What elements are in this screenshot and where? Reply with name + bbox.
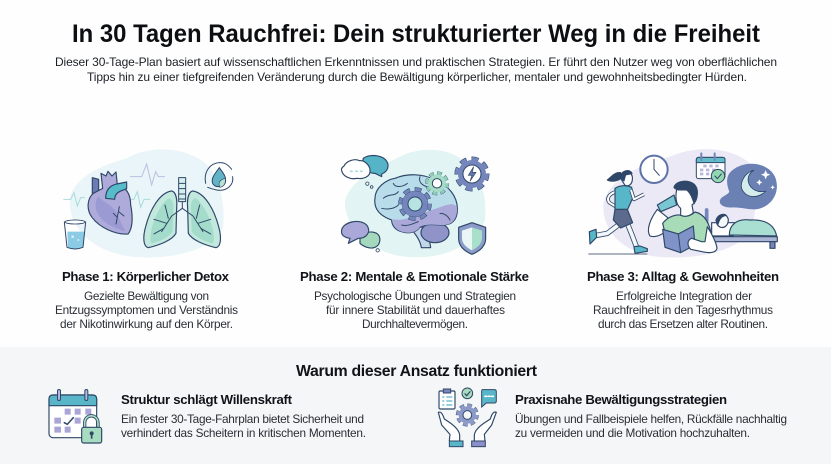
- title: In 30 Tagen Rauchfrei: Dein strukturierter Weg in die Freiheit: [72, 20, 761, 48]
- description: phase 1: Gezielte Bewältigung von: [84, 289, 209, 303]
- description: phase 3: [593, 289, 773, 331]
- icon: heart: [88, 171, 132, 234]
- illustration: body detox: [63, 149, 233, 257]
- heading: structure: Struktur schlägt Willenskraft: [121, 392, 293, 407]
- text: coping strategies: zu vermeiden und die Motivation hochzuhalten.: [515, 426, 750, 440]
- heading: phase 1: Phase 1: Körperlicher Detox: [62, 269, 230, 284]
- icon: night moon: [720, 164, 777, 209]
- icon: hands with gear and checklist: [438, 388, 496, 447]
- description: phase 2: Durchhaltevermögen.: [362, 317, 468, 331]
- icon: energy gear: [457, 159, 487, 189]
- heading: phase 3: Phase 3: Alltag & Gewohnheiten: [587, 269, 779, 284]
- text: structure: Ein fester 30-Tage-Fahrplan bietet Sicherheit und: [121, 412, 364, 426]
- icon: water glass: [64, 220, 86, 249]
- description: phase 3: Rauchfreiheit in den Tagesrhythmus: [593, 303, 773, 317]
- icon: lungs: [144, 178, 221, 248]
- panel: phase 2: [300, 150, 529, 331]
- icon: calendar with lock: [49, 391, 102, 443]
- description: phase 2: für innere Stabilität und dauerhaftes: [326, 303, 505, 317]
- intro text: Dieser 30-Tage-Plan basiert auf wissenschaftlichen Erkenntnissen und praktischen Strategien. Er führt den Nutzer weg von oberflächlichen: [55, 55, 777, 69]
- description: phase 1: der Nikotinwirkung auf den Körper.: [60, 317, 233, 331]
- icon: clock: [640, 156, 668, 183]
- text: structure: [121, 412, 366, 440]
- description: phase 3: Erfolgreiche Integration der: [616, 289, 752, 303]
- description: phase 3: durch das Ersetzen alter Routinen.: [598, 317, 768, 331]
- heading: why it works: Warum dieser Ansatz funktioniert: [296, 363, 538, 380]
- intro text: [55, 55, 777, 84]
- figure: man drinking and reading: [648, 181, 717, 253]
- illustration: daily routines: [588, 149, 777, 257]
- icon: brain with gears: [375, 173, 457, 248]
- icon: speech bubbles: [341, 156, 388, 252]
- figure: sleeping person in bed: [707, 210, 777, 248]
- figure: runner: [588, 170, 647, 254]
- icon: shield: [459, 223, 486, 254]
- illustration: brain: [341, 150, 487, 257]
- panel: phase 1: [55, 149, 238, 331]
- panel: why this approach works: [0, 347, 831, 464]
- description: phase 1: Entzugssymptomen und Verständnis: [55, 303, 238, 317]
- description: phase 2: Psychologische Übungen und Strategien: [314, 289, 516, 303]
- text: structure: verhindert das Scheitern in kritischen Momenten.: [121, 426, 366, 440]
- icon: cycle droplet: [205, 163, 233, 190]
- heading: coping strategies: Praxisnahe Bewältigungsstrategien: [515, 392, 727, 407]
- heading: phase 2: Phase 2: Mentale & Emotionale Stärke: [300, 269, 529, 284]
- text: coping strategies: [515, 412, 787, 440]
- text: coping strategies: Übungen und Fallbeispiele helfen, Rückfälle nachhaltig: [515, 412, 787, 426]
- description: phase 1: [55, 289, 238, 331]
- description: phase 2: [314, 289, 516, 331]
- panel: phase 3: [587, 149, 779, 331]
- intro text: Tipps hin zu einer tiefgreifenden Veränderung durch die Bewältigung körperlicher, mentaler und gewohnheitsbedingter Hürden.: [87, 70, 747, 84]
- icon: calendar: [696, 153, 725, 183]
